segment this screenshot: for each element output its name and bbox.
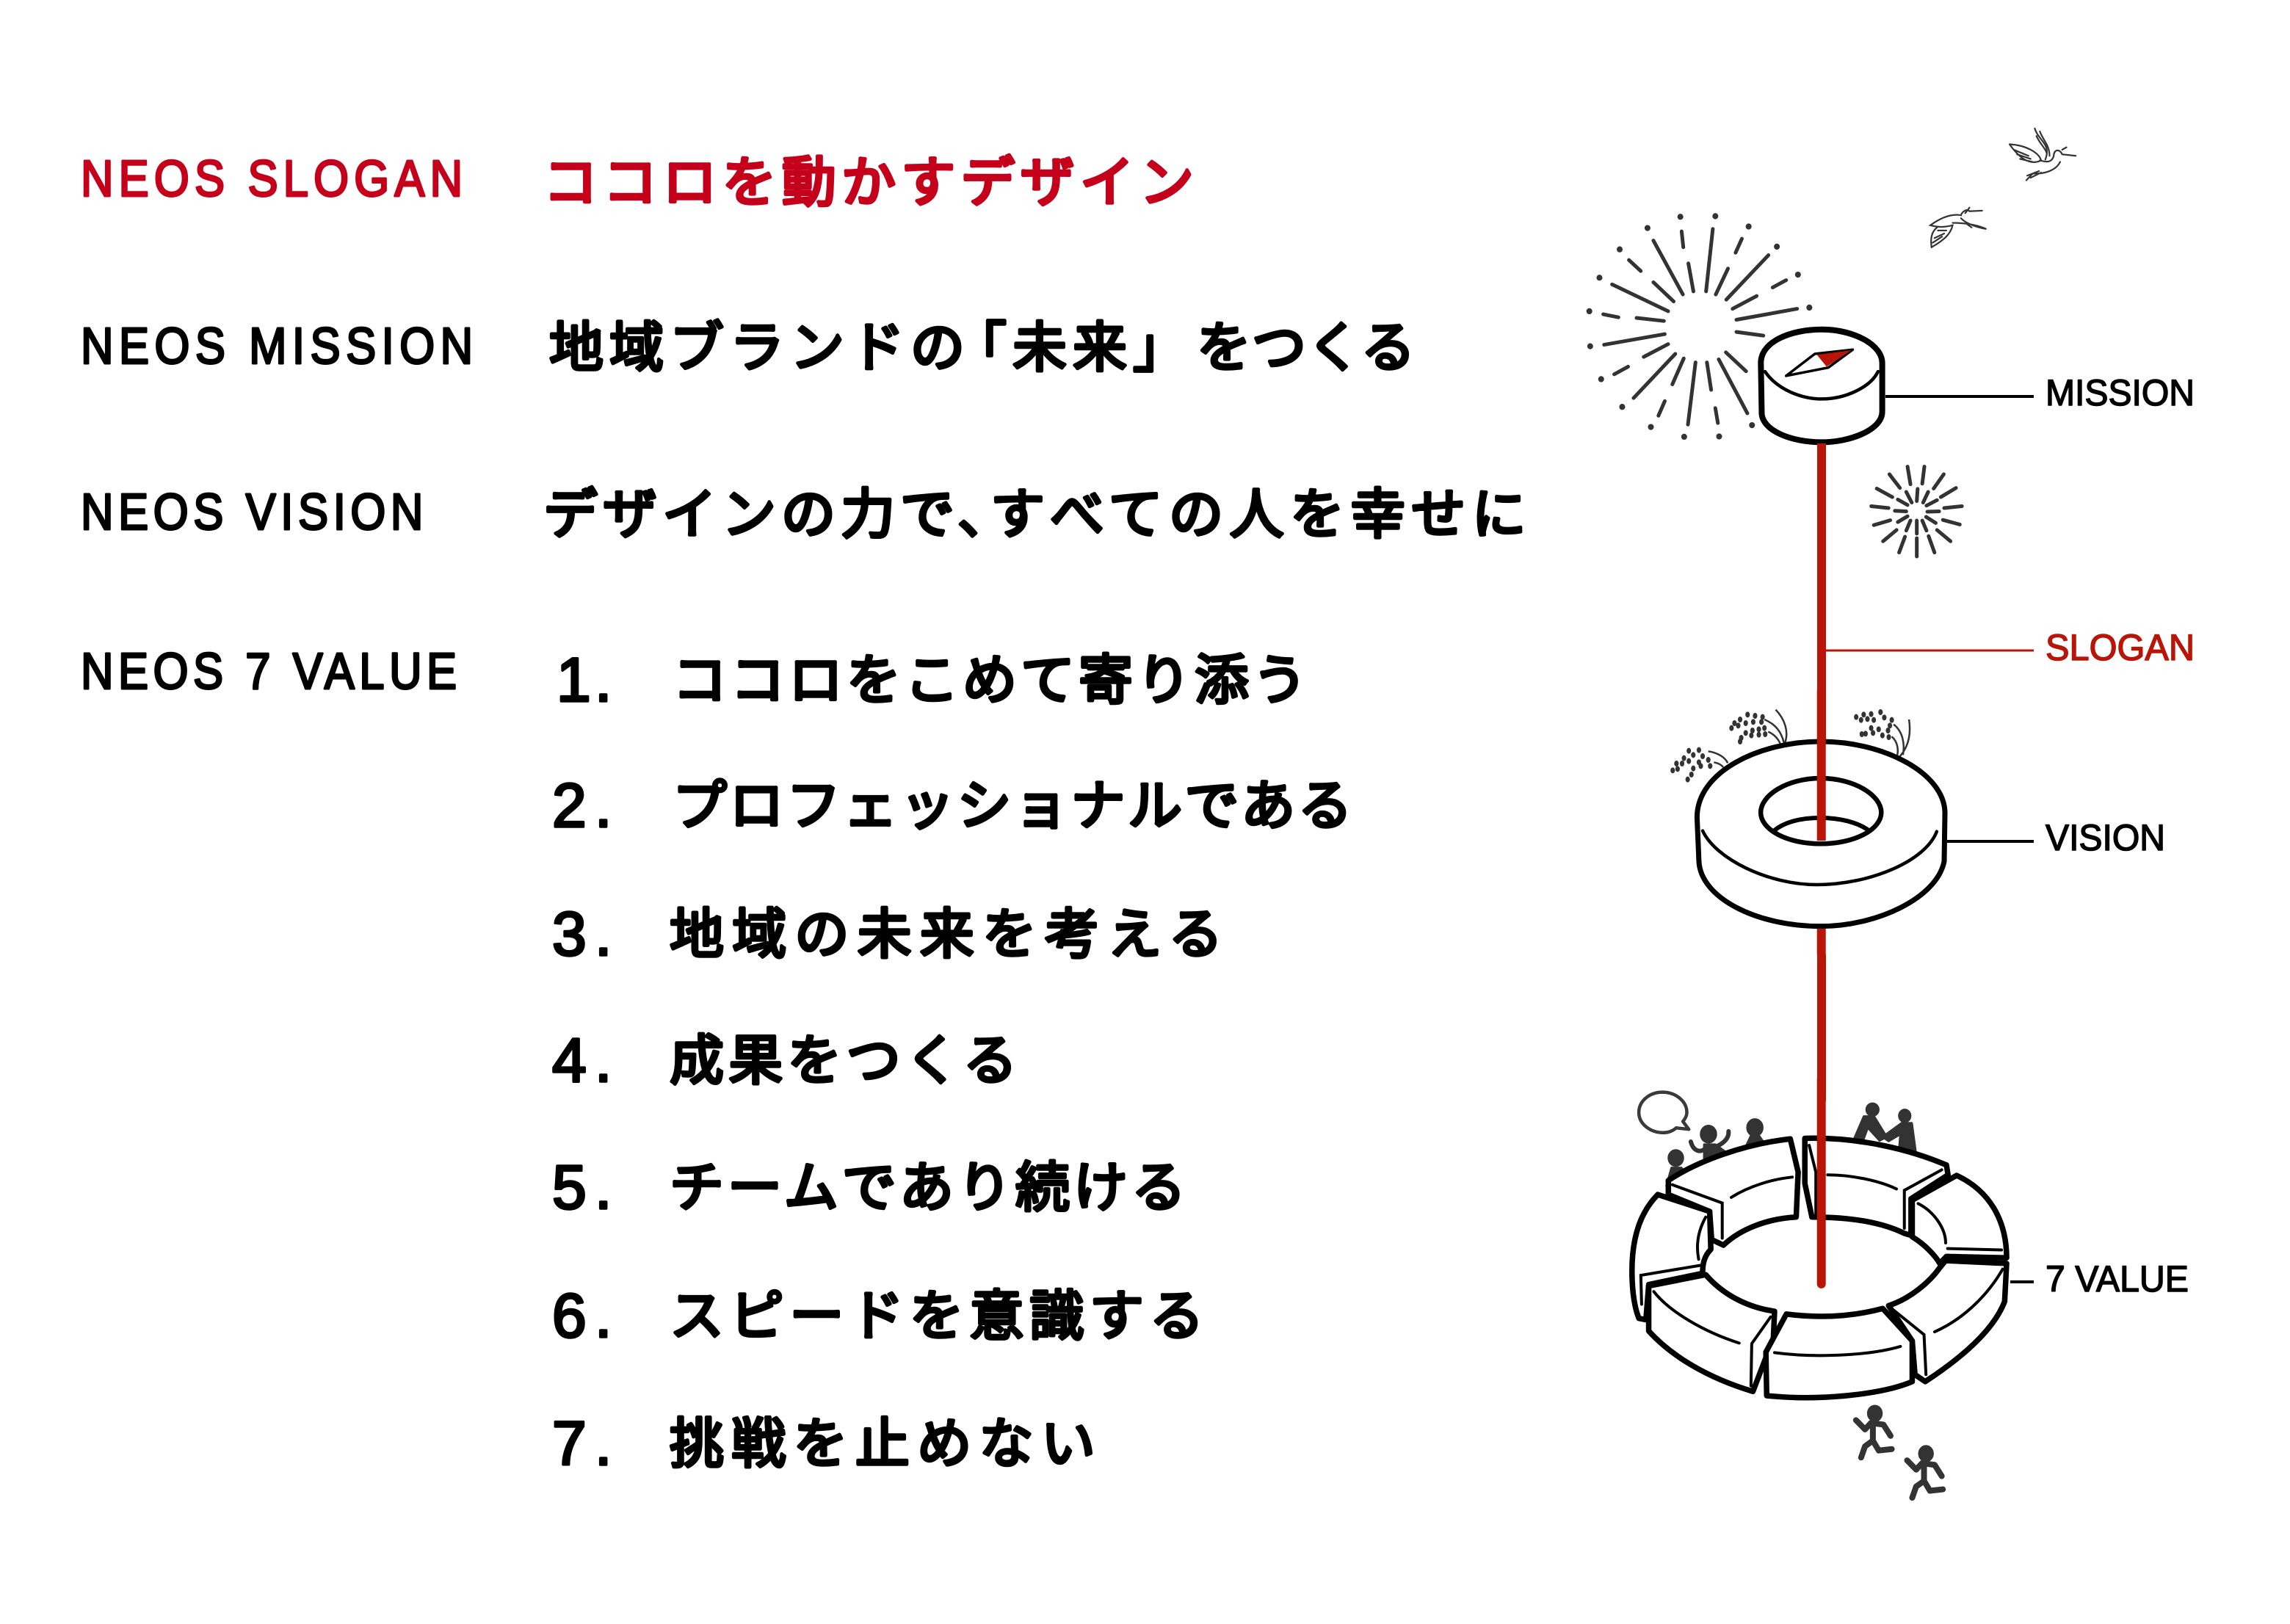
- red axis below ring: [1817, 929, 1826, 954]
- value 3: .: [595, 899, 612, 968]
- ring segment: lower right: [1888, 1261, 2007, 1382]
- value 6: スピードを意識する: [670, 1286, 1209, 1346]
- value 2: .: [595, 771, 612, 840]
- mission text: 地域ブランドの「未来」をつくる: [549, 317, 1416, 378]
- heading: NEOS 7 VALUE: NEOS 7 VALUE: [81, 642, 457, 700]
- value 5: .: [595, 1153, 612, 1222]
- value 4: 4: [552, 1026, 587, 1095]
- heading: NEOS VISION: NEOS VISION: [81, 482, 423, 540]
- value 6: 6: [552, 1281, 587, 1350]
- value 2: 2: [552, 771, 587, 840]
- value 4: 成果をつくる: [670, 1030, 1022, 1091]
- connector: 7 value: [2010, 1280, 2034, 1283]
- label: 7 VALUE: 7 VALUE: [2046, 1258, 2189, 1299]
- value 6: .: [595, 1281, 612, 1350]
- ring segment: top right: [1805, 1138, 1948, 1236]
- list: 7 values: [552, 645, 1355, 1478]
- label: VISION: VISION: [2046, 817, 2165, 858]
- icon: speech bubble: [1639, 1092, 1689, 1133]
- value 1: 1: [557, 645, 591, 714]
- value 7: [552, 1409, 1103, 1478]
- icon: people on ring: [1667, 1103, 1916, 1186]
- value 2: プロフェッショナルである: [673, 775, 1355, 836]
- red axis end: [1817, 1079, 1826, 1284]
- red axis upper: [1817, 443, 1826, 808]
- heading: NEOS MISSION: NEOS MISSION: [81, 316, 473, 374]
- left column: statements: [81, 149, 1532, 700]
- red axis lower: [1817, 954, 1826, 1101]
- icon: small firework: [1872, 467, 1962, 557]
- value 4: [552, 1026, 1022, 1095]
- value 5: チームであり続ける: [670, 1157, 1189, 1218]
- connector: slogan: [1822, 649, 2034, 652]
- value 1: .: [595, 645, 612, 714]
- ring segment: lower left: [1649, 1275, 1775, 1391]
- value 7: 7: [552, 1409, 587, 1478]
- value 5: 5: [552, 1153, 587, 1222]
- value 3: 地域の未来を考える: [670, 904, 1231, 965]
- icon: large firework: [1587, 213, 1812, 440]
- ring segment: right: [1912, 1175, 2007, 1264]
- connector: mission: [1885, 395, 2034, 398]
- icon: crane upper: [2010, 128, 2076, 180]
- red axis through ring: [1817, 690, 1826, 841]
- icon: rice stalks: [1670, 709, 1910, 783]
- vision text: デザインの力で、すべての人を幸せに: [543, 484, 1532, 545]
- value 3: 3: [552, 899, 587, 968]
- diagram: vision ring: [1670, 690, 1945, 954]
- ring segment: left: [1632, 1195, 1711, 1320]
- icon: compass: [1761, 330, 1883, 442]
- slogan text: ココロを動かすデザイン: [543, 152, 1199, 213]
- label: MISSION: MISSION: [2046, 372, 2195, 413]
- heading: NEOS SLOGAN: NEOS SLOGAN: [81, 149, 463, 207]
- icon: runners: [1856, 1405, 1943, 1498]
- ring segment: bottom: [1766, 1308, 1912, 1398]
- connector: vision: [1947, 840, 2034, 843]
- diagram: 7 value ring: [1632, 1079, 2007, 1498]
- value 7: .: [595, 1409, 612, 1478]
- diagram: top section: [1587, 128, 2076, 557]
- icon: crane lower: [1930, 208, 1986, 247]
- label: SLOGAN: SLOGAN: [2046, 627, 2195, 668]
- value 1: ココロをこめて寄り添う: [673, 650, 1311, 711]
- value 7: 挑戦を止めない: [670, 1413, 1103, 1474]
- ring body: [1697, 742, 1945, 927]
- value 4: .: [595, 1026, 612, 1095]
- ring segment: top left: [1668, 1139, 1798, 1245]
